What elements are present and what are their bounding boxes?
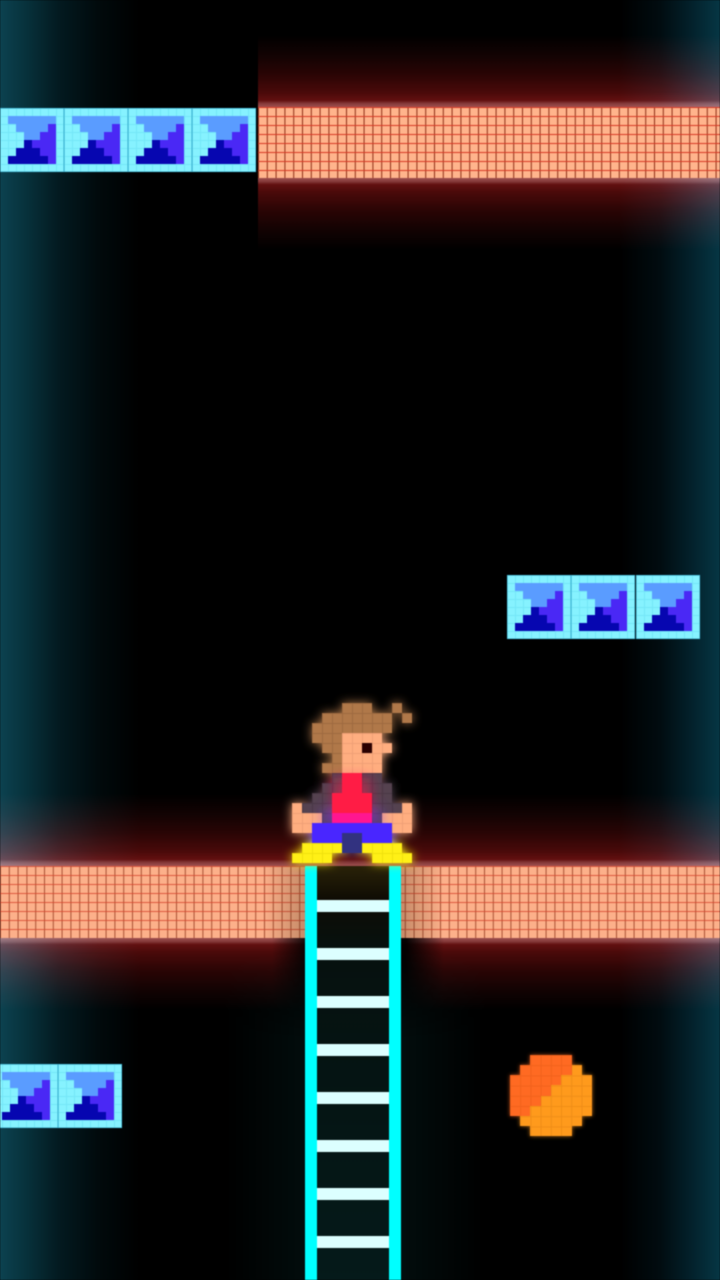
character shoes bbox=[292, 843, 412, 863]
ladder bbox=[305, 866, 401, 1280]
bottom-left blue blocks bbox=[0, 1064, 122, 1128]
character face and hands bbox=[292, 733, 412, 833]
character trousers bbox=[312, 823, 392, 853]
top row of blue blocks bbox=[0, 108, 256, 172]
shirt glow over jacket bbox=[322, 778, 382, 824]
character hair bbox=[312, 703, 412, 773]
upper red platform glow bbox=[258, 35, 720, 250]
ladder ambient glow bbox=[282, 1004, 428, 1280]
upper red brick platform bbox=[258, 107, 720, 178]
character jacket bbox=[302, 773, 402, 823]
character eye bbox=[362, 743, 372, 753]
right row of blue blocks bbox=[507, 575, 700, 639]
lower red platform glow bbox=[0, 794, 720, 1010]
orange ball bbox=[510, 1055, 592, 1136]
pixel character bbox=[292, 703, 412, 863]
lower red brick platform bbox=[0, 866, 720, 938]
character shirt bbox=[332, 773, 372, 823]
